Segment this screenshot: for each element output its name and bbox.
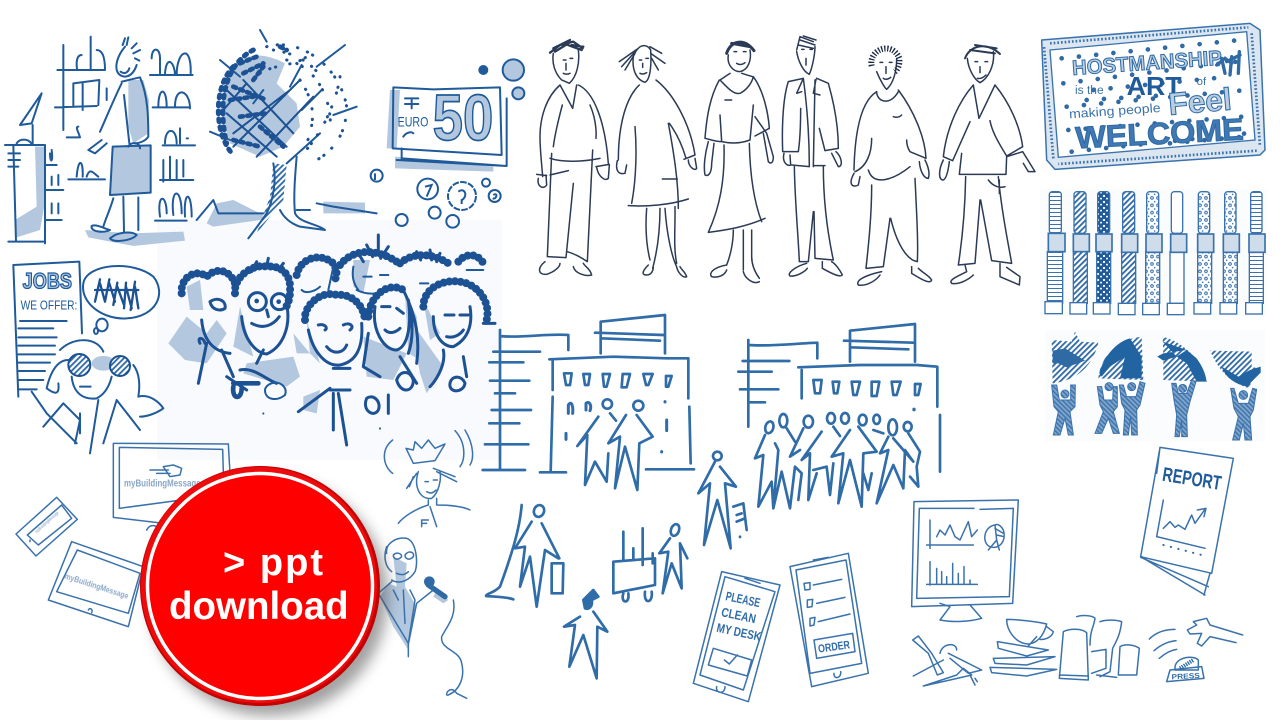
poster word: welcome: WELCOME	[1075, 113, 1244, 155]
illustration: lone walking figure with trolley	[698, 452, 747, 548]
watch straps	[1047, 192, 1263, 303]
person 4	[782, 36, 842, 276]
poster figures	[1217, 52, 1240, 75]
crowd shading	[168, 260, 443, 413]
illustration: monitor, phone and tablet with logo: myBuildingMessage	[63, 571, 130, 601]
person 6	[940, 45, 1035, 285]
poster line: is the: is the	[1075, 83, 1104, 97]
person 2	[617, 46, 697, 277]
coins	[371, 59, 524, 228]
illustration: cutlery, crockery and glasses	[913, 616, 1139, 686]
euro label: EURO	[398, 114, 428, 130]
background: pale crowd panel	[157, 220, 502, 460]
poster word: art: ART	[1127, 71, 1182, 101]
poster headline: HOSTMANSHIP	[1071, 47, 1223, 80]
face: curly right	[423, 281, 495, 391]
thought bubble with staff	[83, 266, 159, 334]
report chart	[1157, 500, 1206, 548]
small marks	[263, 382, 380, 429]
illustration: cleaner with vacuum	[486, 504, 563, 607]
monitor logo: myBuildingMessage	[124, 479, 201, 490]
illustration: line-drawn team of six	[537, 36, 1035, 285]
illustration: crowd of faces	[168, 235, 495, 445]
illustration: monitor, phone and tablet with logo	[16, 443, 230, 627]
illustration: shopper in a store	[5, 37, 195, 246]
tablet	[48, 542, 143, 627]
lectern	[5, 93, 63, 243]
watch buckles	[1045, 302, 1262, 315]
face: glasses	[235, 258, 290, 383]
offer label: WE OFFER:	[21, 297, 77, 312]
dense leaves and hatch	[223, 80, 313, 157]
confirm checkbox	[708, 648, 752, 676]
face: left	[182, 271, 258, 397]
jobs heading: JOBS	[23, 268, 72, 293]
shop shelves and products	[55, 37, 195, 221]
trunk hatching	[257, 163, 287, 233]
tree outline and branches	[197, 30, 377, 238]
press label: PRESS	[1171, 671, 1200, 681]
person 3	[704, 42, 773, 283]
illustration: monitor, phone and tablet with logo: myBuildingMessage	[34, 510, 60, 534]
phone message: MY DESK	[715, 621, 763, 644]
windows	[813, 380, 921, 396]
monitor	[113, 443, 230, 530]
puzzle pieces	[1052, 332, 1261, 388]
figures	[603, 399, 612, 409]
illustration: phone please clean my desk	[693, 572, 780, 702]
button rim	[140, 466, 380, 706]
face: centre	[298, 294, 365, 445]
illustration: porter with cap	[564, 590, 607, 678]
illustration: queen with crown	[384, 430, 473, 527]
man	[60, 340, 103, 352]
illustration: jobs board with man and binoculars	[13, 262, 163, 453]
button white ring	[148, 474, 372, 698]
phone message: PLEASE	[724, 589, 762, 610]
illustration: report booklet	[1141, 447, 1233, 595]
phone	[16, 497, 77, 556]
watch cases	[1048, 233, 1265, 252]
job list	[18, 321, 67, 389]
pie chart	[985, 525, 1004, 550]
panel: hostmanship welcome poster	[1042, 23, 1265, 169]
illustration: euro note and coins	[371, 59, 524, 228]
illustration: hand pressing service bell	[1149, 618, 1243, 682]
button label: > ppt	[223, 542, 323, 584]
poster dots	[1062, 40, 1250, 152]
illustration: dashboard monitor	[912, 500, 1018, 622]
panel: row of wristwatches	[1040, 189, 1267, 316]
order button label: ORDER	[817, 639, 851, 656]
binoculars	[68, 354, 130, 376]
face: long hair	[363, 287, 418, 413]
illustration: speaker with microphone	[378, 538, 467, 698]
button shadow	[150, 478, 388, 716]
illustration: hotel building with crowd	[738, 324, 940, 508]
poster word: of: of	[1197, 76, 1207, 88]
panel: people lifting globe puzzle pieces	[1045, 330, 1265, 442]
button label second line: download	[169, 585, 349, 628]
lifting figures	[1052, 380, 1257, 440]
red download button	[140, 466, 388, 716]
line chart	[927, 520, 977, 548]
poster word: feel: Feel	[1167, 82, 1233, 122]
illustration: housekeeper with cart	[613, 523, 687, 601]
illustration: hotel building with two figures	[483, 315, 694, 490]
windows	[564, 373, 672, 387]
report title: REPORT	[1161, 464, 1223, 495]
illustration: phone order form	[790, 553, 868, 687]
crowd of figures	[755, 409, 920, 508]
person 5	[851, 48, 932, 285]
poster dotted frame	[1044, 27, 1260, 164]
shopper figure	[88, 37, 148, 241]
bar chart	[927, 562, 977, 585]
rear faces	[297, 235, 485, 294]
illustration: money tree	[197, 30, 377, 238]
shopping bag	[110, 145, 151, 195]
person 1	[537, 40, 609, 275]
phone message: CLEAN	[720, 605, 757, 626]
phone message	[715, 589, 763, 644]
poster line: making people: making people	[1069, 101, 1161, 121]
fifty numeral: 50	[433, 81, 493, 154]
